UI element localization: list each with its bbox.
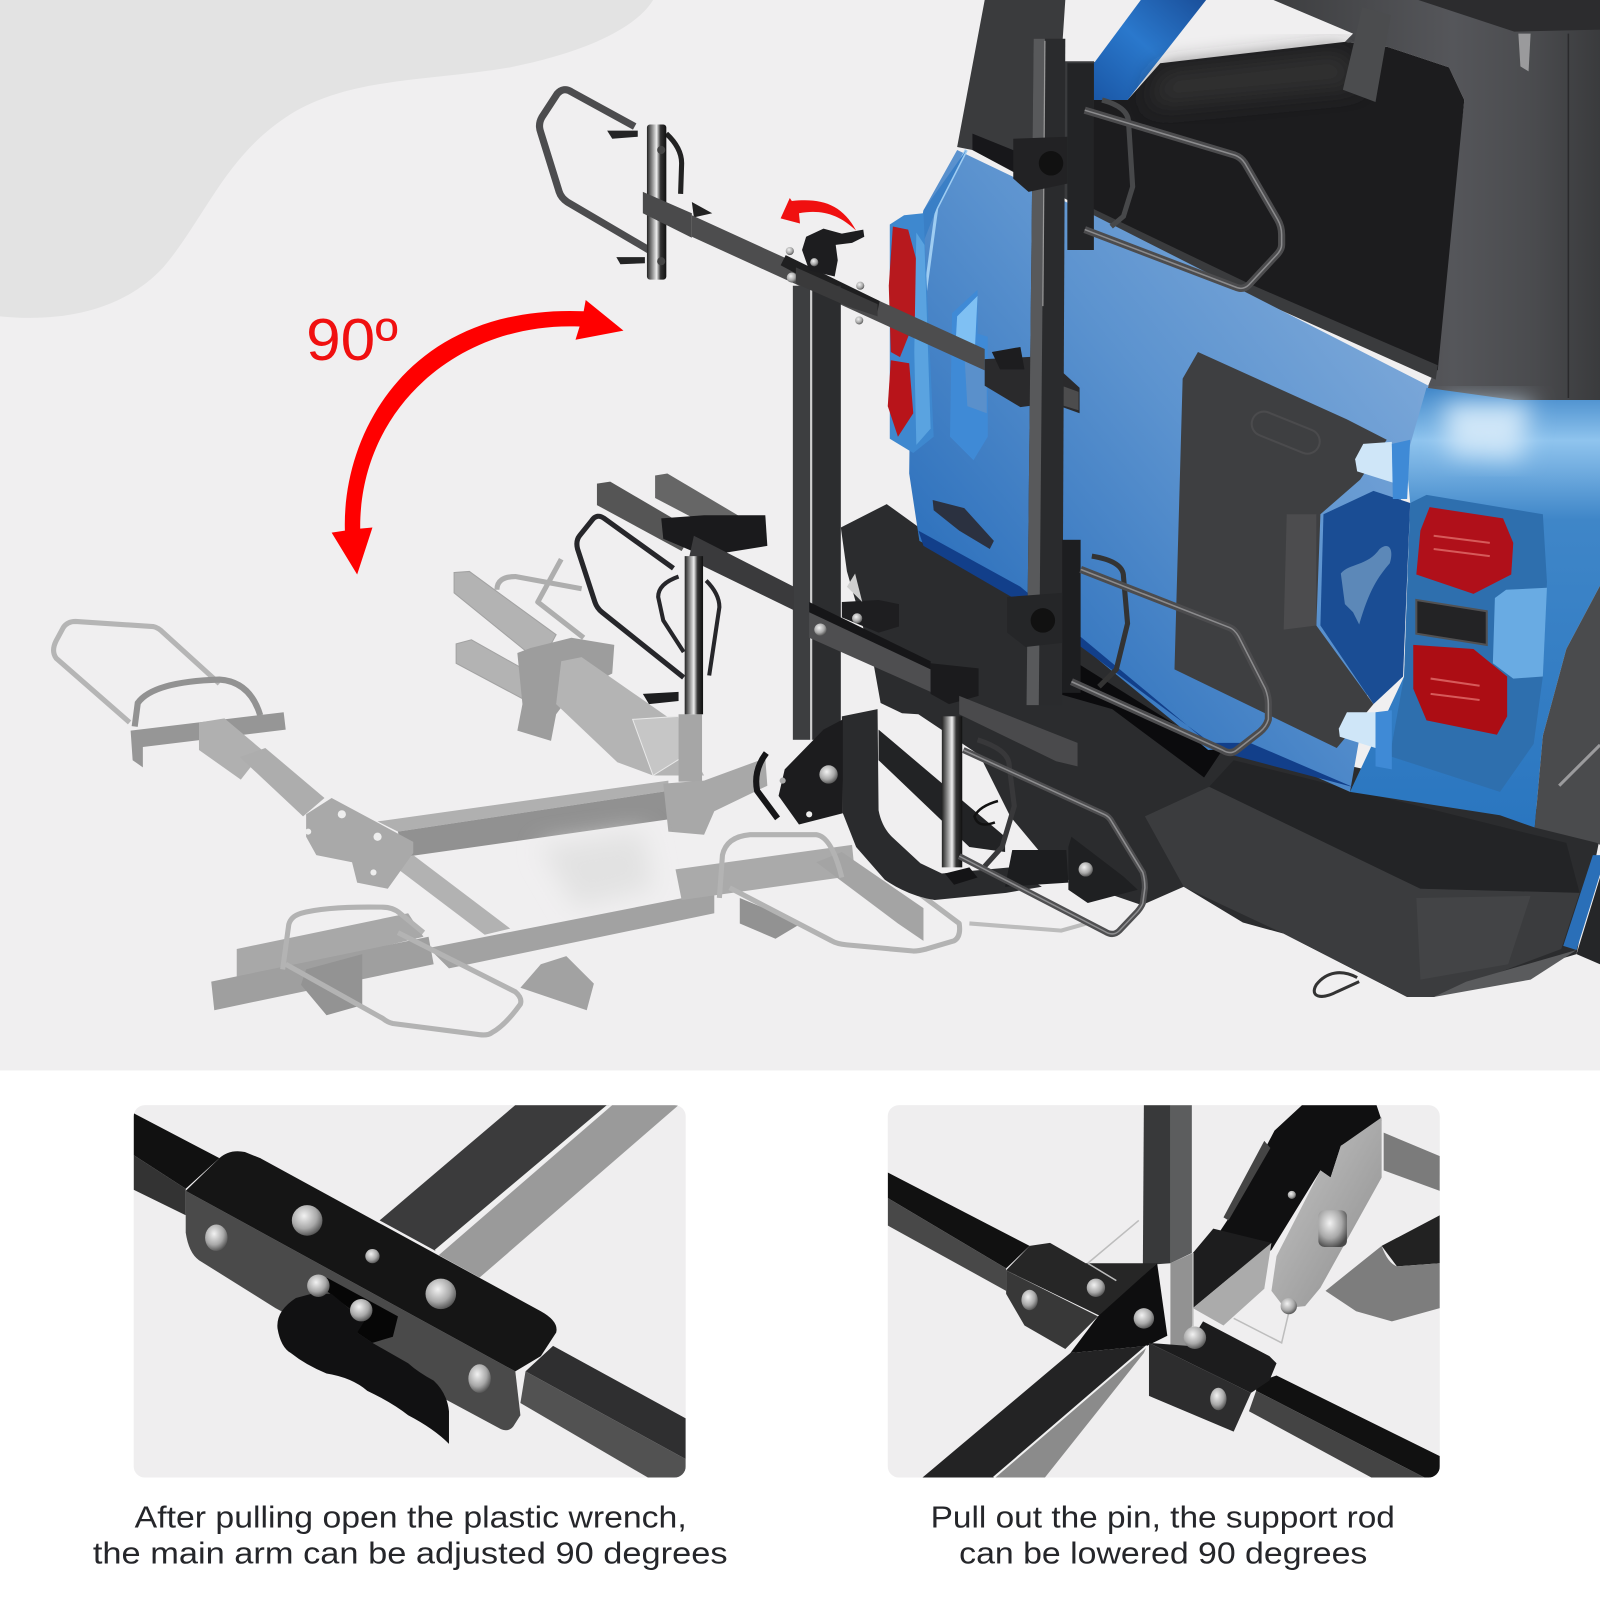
vehicle rear (841, 0, 1600, 997)
rear window (1092, 42, 1464, 370)
vertical tube (647, 124, 666, 280)
caption: plastic wrench (93, 1501, 728, 1570)
plastic wrench (277, 1294, 449, 1444)
caption: plastic wrench: After pulling open the plastic wrench, (135, 1501, 687, 1535)
detail card: plastic wrench (134, 1105, 686, 1478)
upright post (793, 286, 841, 740)
upper hoop (1085, 110, 1282, 288)
main arm lowered (689, 536, 794, 610)
bolts (1021, 1191, 1347, 1410)
large red rotation arrow (332, 300, 623, 574)
left arm (888, 1172, 1030, 1268)
rear vertical rack on vehicle (1007, 39, 1282, 753)
flat pin tabs (607, 131, 638, 139)
folded upper rack position (540, 90, 1080, 740)
tailgate emblem (933, 500, 994, 549)
silver post base (1170, 1253, 1193, 1353)
plate top (186, 1151, 557, 1371)
grey vertical stub (679, 714, 702, 782)
roof tab (1343, 7, 1391, 102)
right bar (526, 1346, 686, 1459)
tube foot (945, 867, 978, 885)
grey long arm (240, 748, 324, 816)
grey main crossbar (378, 781, 668, 832)
rear vent (1416, 600, 1487, 645)
black hoop (577, 516, 684, 678)
grey right hoop (719, 835, 960, 951)
wheel arch (1535, 586, 1600, 845)
clamp block (985, 356, 1080, 413)
roof cap (1418, 0, 1600, 32)
lower main arm (809, 608, 931, 692)
center plate top (1149, 1321, 1277, 1393)
pivot plate (779, 719, 843, 824)
lower strap (978, 740, 1014, 866)
wire loop (974, 801, 998, 824)
grey left U bracket (135, 680, 260, 727)
plate side (186, 1191, 520, 1430)
pins and wires (1088, 1220, 1290, 1343)
pony emblem plate (1320, 491, 1410, 704)
front vertical tube (942, 716, 962, 867)
grey soft shadow (541, 832, 653, 908)
90 degree label: 90º (306, 306, 398, 373)
grey lower crossbar (429, 892, 714, 968)
small red lever arrow (781, 198, 856, 231)
left curved strap (756, 753, 778, 818)
lower strap (1092, 556, 1128, 687)
lowered black rack section (577, 473, 1078, 766)
arm over post (796, 267, 878, 316)
caption: support rod: Pull out the pin, the support rod (931, 1501, 1395, 1535)
grey lower hoop (283, 907, 521, 1035)
grey upper arm (556, 657, 704, 776)
caption: support rod: can be lowered 90 degrees (959, 1536, 1367, 1570)
lower bar extension (959, 696, 1078, 766)
slot (327, 1278, 398, 1343)
bolts (205, 1205, 491, 1393)
upper strap (1102, 100, 1133, 227)
caption: support rod (931, 1501, 1395, 1570)
blue tailgate (909, 150, 1429, 792)
rear bumper (841, 504, 1600, 997)
silver bracket (1271, 1117, 1382, 1308)
hero background panel (0, 0, 1600, 1070)
blue corner strip (1563, 855, 1600, 950)
blue roll bar (1094, 0, 1206, 100)
grey upper clamp block (517, 638, 614, 741)
receiver tube (1005, 850, 1068, 887)
black tab (643, 692, 679, 704)
lower hinge plate (842, 600, 899, 633)
grey left hoop (54, 621, 219, 722)
door hinges (1339, 440, 1547, 769)
grey adjuster bracket (306, 798, 413, 889)
crossing tube (380, 1105, 609, 1251)
tail light recess (1390, 495, 1547, 792)
right tail light upper (1416, 507, 1513, 594)
grey right bar block (676, 845, 855, 900)
front bar (922, 1346, 1147, 1478)
vertical tube (685, 556, 703, 714)
front hoop (959, 750, 1145, 934)
lower clamp (931, 663, 979, 704)
retaining strap (666, 134, 682, 194)
grey left crossbar (131, 712, 286, 767)
left hoop (540, 90, 649, 250)
detail card: support rod pin (888, 1105, 1440, 1478)
lower hoop (1071, 569, 1268, 753)
card background (888, 1105, 1440, 1478)
hardtop roof and side (1273, 0, 1600, 403)
rack block (643, 192, 692, 238)
left plate top (1006, 1243, 1157, 1316)
spare tire carrier plate (1174, 352, 1387, 748)
left tail light (888, 213, 934, 453)
black clamps (661, 515, 767, 556)
side channels (1067, 63, 1094, 250)
fender (1350, 388, 1600, 828)
silver lower strut (1193, 1243, 1271, 1326)
tailgate handle (950, 290, 988, 460)
hitch bracket (1068, 837, 1138, 903)
right tail light lower (1413, 645, 1507, 735)
large grey J arm (1384, 1133, 1440, 1191)
center plate side (1149, 1343, 1251, 1432)
right arm (1256, 1376, 1440, 1478)
hitch pin loop (1314, 973, 1359, 996)
main arm (692, 215, 985, 370)
black straps (658, 577, 719, 676)
J arm (842, 709, 1042, 900)
decorative grey blob (0, 0, 653, 318)
grey upper bars (454, 571, 556, 703)
post (1027, 39, 1065, 705)
grey upper hoop (497, 559, 584, 638)
left plate side (1006, 1270, 1098, 1349)
diagonal brace (879, 730, 1005, 852)
upper knob block (1013, 137, 1067, 192)
hardtop pillar (957, 0, 1128, 212)
hitch J arm and lower hoop (756, 709, 1145, 934)
lowered rack shown in grey (54, 559, 1087, 1035)
post (1143, 1105, 1170, 1265)
left bar (134, 1113, 219, 1189)
grey lower left bars (237, 913, 423, 982)
plastic wrench handle (802, 229, 864, 277)
caption: plastic wrench: the main arm can be adjusted 90 degrees (93, 1536, 728, 1570)
grey-black rear bars (597, 482, 694, 551)
upper black tube (1220, 1105, 1382, 1276)
card background (134, 1105, 686, 1478)
black center (1070, 1263, 1167, 1353)
lower knob block (1007, 593, 1062, 647)
